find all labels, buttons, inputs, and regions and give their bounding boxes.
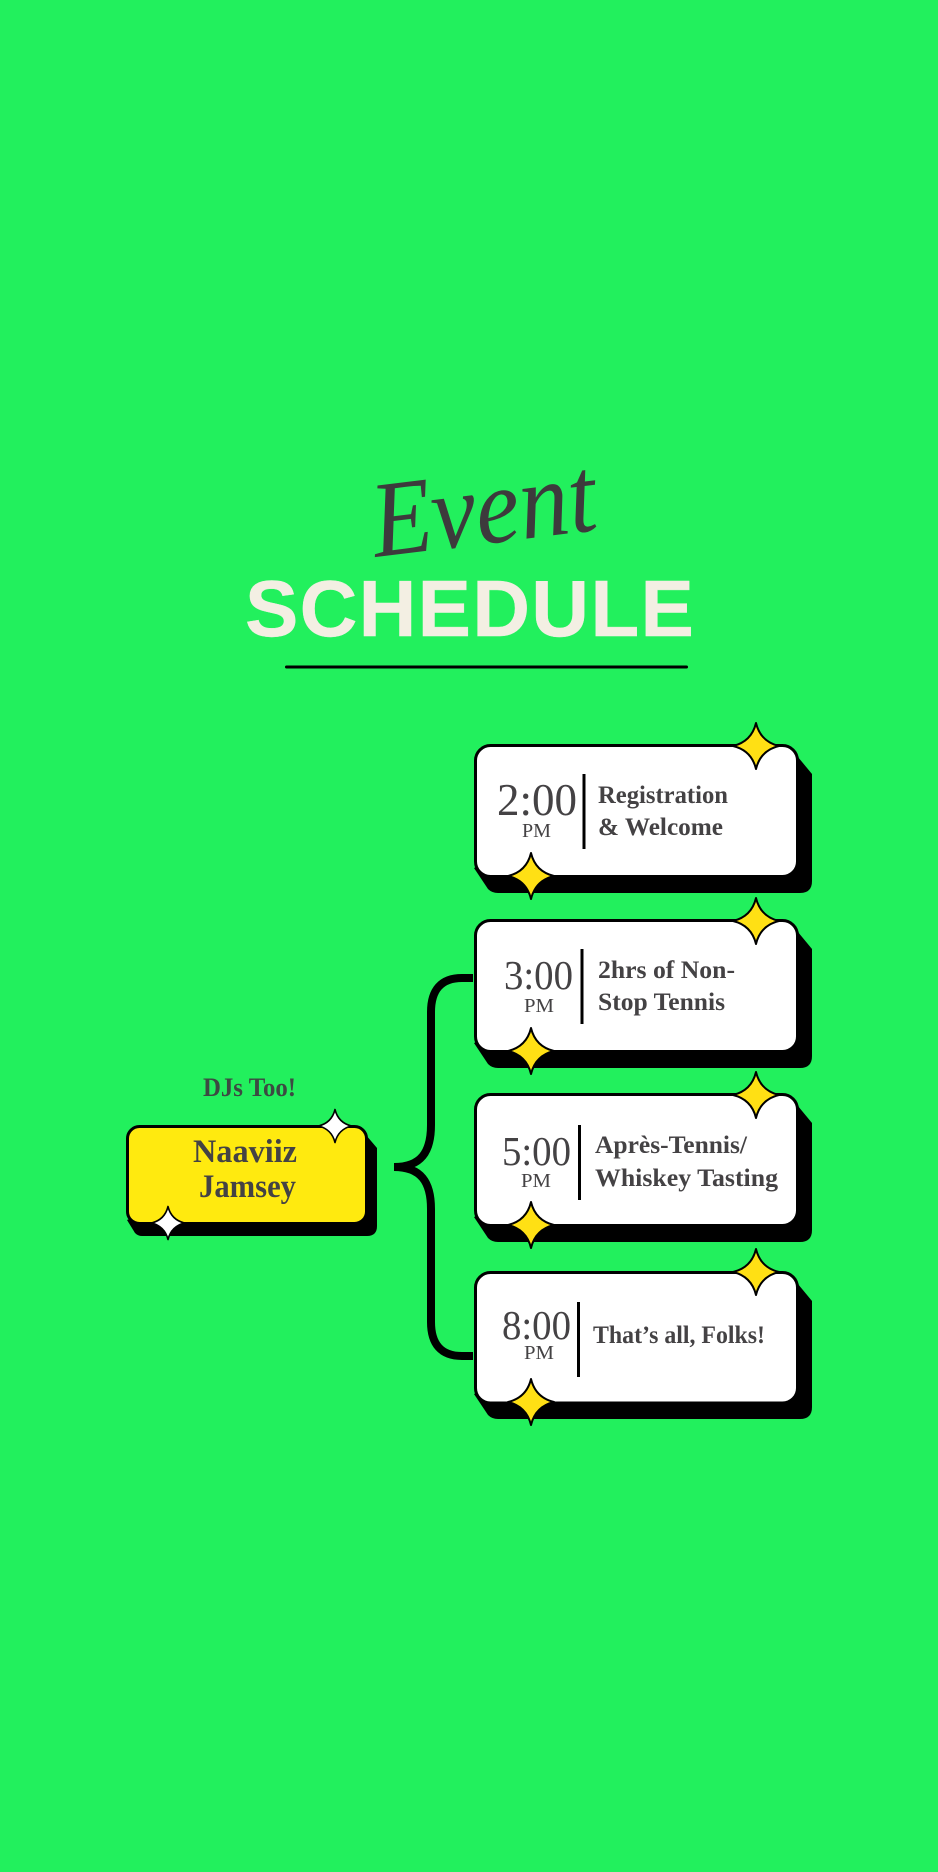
divider <box>578 1125 581 1200</box>
icon: yellow sparkle top right <box>733 898 779 944</box>
card shadow <box>474 920 812 1068</box>
description: Registration <box>598 782 728 809</box>
icon: yellow sparkle bottom left <box>508 1202 554 1248</box>
panel: 8:00 PM card <box>474 1249 812 1425</box>
icon: yellow sparkle top right <box>733 1249 779 1295</box>
panel: Naaviiz Jamsey card: Jamsey <box>199 1169 296 1205</box>
time: 5:00 <box>502 1128 571 1174</box>
description: That’s all, Folks! <box>593 1322 765 1349</box>
icon: yellow sparkle bottom left <box>508 1379 554 1425</box>
panel: Naaviiz Jamsey card <box>127 1110 377 1240</box>
panel: 2:00 PM card: PM <box>522 820 551 842</box>
icon: yellow sparkle top right <box>733 1072 779 1118</box>
card body <box>128 1126 366 1224</box>
note: DJs Too!: DJs Too! <box>203 1073 296 1102</box>
panel: 3:00 PM card: PM <box>524 995 554 1017</box>
card body <box>476 1272 798 1403</box>
icon: yellow sparkle bottom left <box>508 1028 554 1074</box>
title underline <box>285 666 688 668</box>
description: Après-Tennis/ <box>595 1132 748 1159</box>
icon: yellow sparkle top right <box>733 723 779 769</box>
card body <box>476 746 798 876</box>
panel: 3:00 PM card: Stop Tennis <box>598 989 725 1016</box>
panel: 2:00 PM card: & Welcome <box>598 814 723 841</box>
panel: 5:00 PM card: PM <box>521 1170 551 1192</box>
artist name: Naaviiz <box>193 1134 297 1170</box>
time: 8:00 <box>502 1302 571 1348</box>
divider <box>580 949 584 1024</box>
card shadow <box>127 1128 377 1236</box>
title: Event script word: Event <box>363 435 605 581</box>
card body <box>476 920 798 1052</box>
icon: white sparkle top right <box>318 1110 352 1142</box>
time: 3:00 <box>504 952 573 998</box>
divider <box>577 1302 580 1377</box>
panel: 5:00 PM card <box>474 1072 812 1248</box>
panel: 2:00 PM card <box>474 723 812 899</box>
time: 2:00 <box>497 774 577 825</box>
title: SCHEDULE heading: SCHEDULE <box>245 564 695 653</box>
card body <box>476 1094 798 1226</box>
description: 2hrs of Non- <box>598 957 735 984</box>
panel: 5:00 PM card: Whiskey Tasting <box>595 1165 779 1192</box>
panel: 8:00 PM card: PM <box>524 1342 554 1364</box>
card shadow <box>474 1272 812 1419</box>
icon: white sparkle bottom left <box>152 1206 184 1240</box>
card shadow <box>474 1094 812 1242</box>
bracket connector <box>394 978 473 1356</box>
divider <box>582 774 586 849</box>
icon: yellow sparkle bottom left <box>508 853 554 899</box>
panel: 3:00 PM card <box>474 898 812 1074</box>
card shadow <box>474 745 812 893</box>
